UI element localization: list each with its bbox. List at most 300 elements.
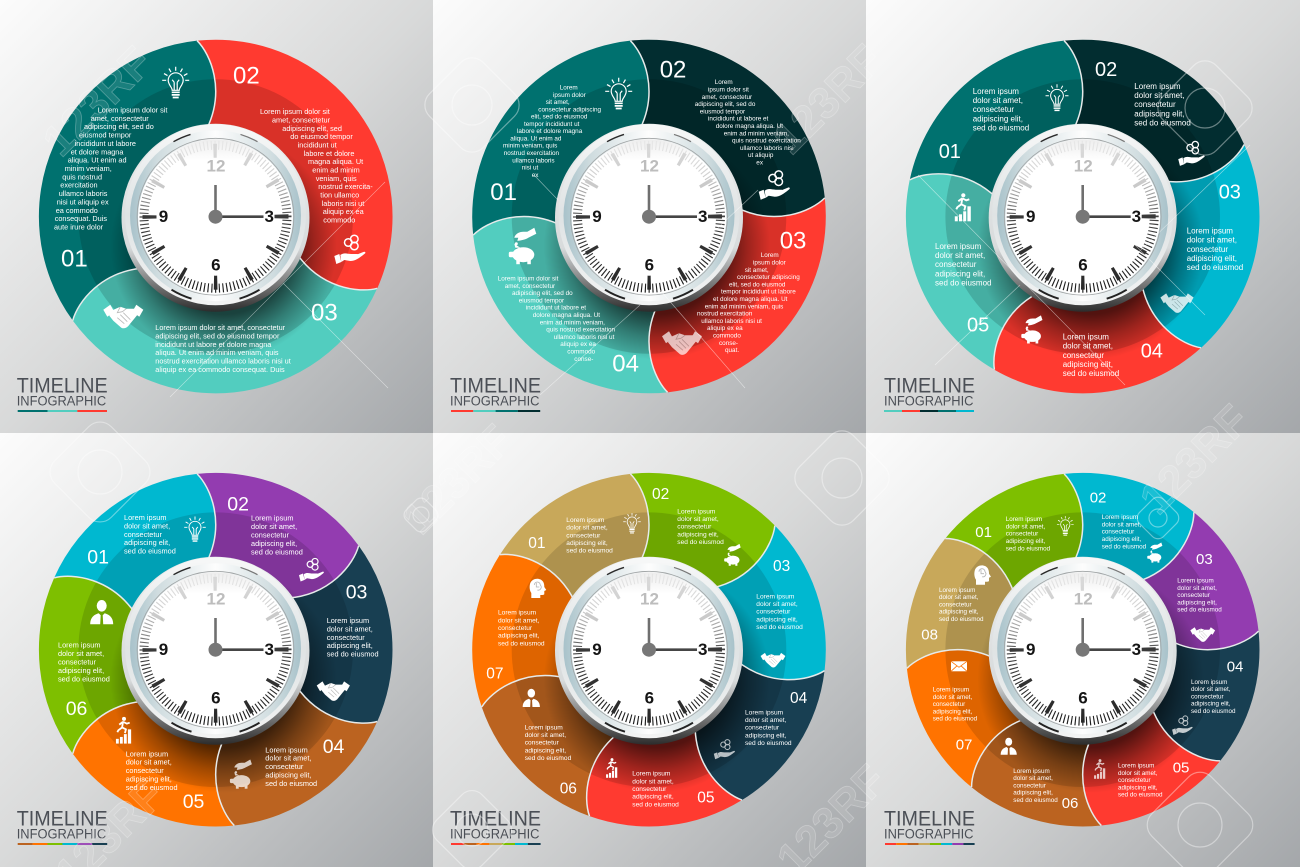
- text block 02: amet, consectetur: [702, 94, 752, 101]
- text block 03: nostrud exercitation: [697, 311, 753, 318]
- text block 04: consectetur: [745, 725, 780, 732]
- text block 02: ut aliquip: [748, 152, 774, 159]
- number 08: 08: [921, 627, 938, 644]
- text block 02: dolor sit amet,: [1102, 521, 1141, 528]
- text block 02: dolor sit amet,: [1134, 91, 1185, 100]
- number 05: 05: [697, 789, 715, 806]
- text block 04: incididunt ut labore et: [526, 305, 586, 312]
- text block 02: sed do eiusmod: [1102, 543, 1147, 550]
- text block 02: Lorem: [715, 79, 733, 86]
- text block 06: dolor sit amet,: [58, 649, 104, 658]
- text block 02: adipiscing elit,: [677, 531, 719, 538]
- segment 05: [1004, 637, 1221, 853]
- text block 03: sed do eiusmod: [1177, 607, 1222, 614]
- text block 06: consectetur: [525, 740, 560, 747]
- text block 07: adipiscing elit,: [933, 708, 973, 715]
- clock: [989, 124, 1177, 312]
- text block 02: Lorem ipsum: [251, 514, 293, 523]
- text block 01: nostrud exercitation: [504, 150, 560, 157]
- clock: 12: [207, 590, 225, 609]
- icon: handshake: [662, 331, 702, 355]
- number 06: 06: [1062, 795, 1078, 812]
- text block 07: Lorem ipsum: [933, 686, 969, 694]
- text block 01: ea commodo: [56, 206, 98, 215]
- icon: light bulb: [162, 67, 189, 98]
- clock: 12: [207, 157, 225, 176]
- segment 01: [472, 41, 649, 235]
- clock: 6: [645, 256, 654, 275]
- text block 04: dolor sit amet,: [1191, 686, 1231, 693]
- panel: 6-step timeline: [0, 433, 440, 867]
- clock: 3: [698, 207, 707, 226]
- segment 04: [621, 632, 826, 812]
- icon: envelope: [951, 661, 967, 671]
- text block 05: dolor sit amet,: [126, 758, 172, 767]
- logo: timeline infographic: TIMELINE: [450, 808, 541, 831]
- segment 01: [53, 437, 287, 666]
- text block 03: adipiscing elit, sed do eiusmod tempor: [155, 332, 280, 341]
- text block 01: tempor incididunt ut: [524, 121, 580, 128]
- icon: handshake: [761, 653, 785, 667]
- text block 08: consectetur: [939, 601, 972, 608]
- panel background: [433, 433, 867, 867]
- text block 03: commodo: [713, 332, 741, 340]
- text block 04: aliquip ex ea: [560, 341, 596, 348]
- icon: hand with coins: [1178, 141, 1205, 166]
- text block 01: sed do eiusmod: [1006, 545, 1051, 552]
- text block 02: consectetur: [1102, 529, 1134, 536]
- clock: [555, 124, 743, 312]
- text block 04: dolore magna aliqua. Ut: [533, 312, 600, 319]
- text block 03: incididunt ut labore et dolore magna: [155, 340, 272, 349]
- text block 02: quis nostrud exercitation: [732, 138, 801, 145]
- text block 04: conse-: [574, 356, 593, 363]
- text block 02: ipsum dolor sit: [708, 86, 749, 94]
- text block 06: consectetur: [58, 657, 97, 666]
- segment 02: [1064, 473, 1194, 650]
- logo: timeline infographic: INFOGRAPHIC: [450, 394, 540, 409]
- text block 03: Lorem ipsum dolor sit amet, consectetur: [155, 323, 286, 332]
- clock: 9: [159, 207, 168, 226]
- icon: hand with coins: [299, 558, 324, 582]
- text block 02: Lorem ipsum: [677, 508, 716, 515]
- number 01: 01: [61, 246, 88, 273]
- text block 03: consectetur: [327, 633, 365, 642]
- logo: timeline infographic: INFOGRAPHIC: [884, 394, 974, 409]
- text block 05: Lorem ipsum: [632, 771, 671, 778]
- number 02: 02: [660, 57, 686, 84]
- text block 03: conse-: [719, 340, 738, 347]
- text block 01: ex: [532, 172, 539, 179]
- text block 04: dolor sit amet,: [265, 754, 311, 763]
- text block 03: dolor sit amet,: [327, 624, 373, 633]
- segment 06: [0, 526, 225, 754]
- logo: timeline infographic: INFOGRAPHIC: [450, 827, 540, 842]
- text block 03: dolor sit amet,: [1187, 236, 1237, 245]
- text block 04: sed do eiusmod: [745, 740, 792, 747]
- icon: handshake: [317, 681, 350, 701]
- text block 03: dolor sit amet,: [756, 601, 798, 608]
- clock: [122, 124, 310, 312]
- text block 04: ullamco laboris nisi ut: [554, 334, 615, 341]
- text block 01: adipiscing elit, sed do: [84, 122, 154, 131]
- text block 02: tion ullamco: [320, 190, 359, 200]
- text block 02: nostrud exercita-: [318, 182, 373, 191]
- text block 01: sed do eiusmod: [566, 548, 613, 555]
- icon: person: [523, 689, 540, 707]
- number 01: 01: [87, 547, 109, 569]
- text block 03: sit amet,: [745, 267, 769, 274]
- text block 02: consectetur: [677, 524, 712, 531]
- text block 02: dolore magna aliqua. Ut: [716, 123, 783, 130]
- icon: piggy bank: [230, 760, 252, 789]
- text block 01: aute irure dolor: [54, 223, 104, 232]
- text block 02: Lorem ipsum dolor sit: [260, 107, 330, 116]
- logo: timeline infographic: INFOGRAPHIC: [17, 394, 106, 409]
- text block 03: enim ad minim veniam, quis: [705, 303, 783, 310]
- segment 03: [649, 198, 826, 392]
- clock: 12: [640, 590, 659, 609]
- segment 07: [879, 571, 1096, 788]
- text block 06: sed do eiusmod: [1013, 797, 1058, 804]
- number 04: 04: [323, 736, 345, 758]
- text block 07: adipiscing elit,: [498, 633, 540, 640]
- number 04: 04: [1141, 340, 1163, 362]
- text block 04: Lorem ipsum: [1063, 332, 1109, 342]
- watermarks: 123RF: [394, 416, 522, 544]
- segment 04: [473, 216, 668, 393]
- text block 01: Lorem ipsum: [124, 513, 166, 522]
- clock: 3: [264, 207, 274, 226]
- text block 02: veniam, quis: [316, 174, 357, 183]
- text block 02: adipiscing elit,: [1134, 109, 1185, 118]
- text block 01: eiusmod tempor: [79, 131, 132, 140]
- text block 04: sed do eiusmod: [1191, 708, 1236, 715]
- text block 02: enim ad minim veniam,: [724, 130, 789, 137]
- text block 06: dolor sit amet,: [525, 732, 566, 739]
- text block 05: sed do eiusmod: [126, 783, 178, 792]
- clock: 6: [1078, 689, 1088, 708]
- panel: 4-step timeline: [433, 0, 867, 434]
- clock: 3: [698, 640, 707, 659]
- logo: timeline infographic: INFOGRAPHIC: [17, 827, 106, 842]
- number 04: 04: [1227, 658, 1243, 675]
- text block 06: adipiscing elit,: [58, 666, 104, 675]
- clock: [122, 557, 310, 745]
- segment 01: [0, 27, 289, 321]
- text block 03: adipiscing elit,: [327, 641, 373, 650]
- segment 02: [1064, 40, 1244, 216]
- text block 01: dolor sit amet,: [1006, 523, 1045, 530]
- text block 03: adipiscing elit,: [1187, 254, 1237, 263]
- text block 05: consectetur: [935, 260, 977, 269]
- logo: timeline infographic: [450, 808, 541, 845]
- text block 01: Lorem ipsum: [566, 517, 605, 524]
- icon: hand with coins: [714, 740, 735, 759]
- watermarks: 123RF: [764, 36, 892, 164]
- text block 01: consequat. Duis: [55, 214, 107, 223]
- text block 01: incididunt ut labore: [75, 139, 136, 148]
- icon: person: [90, 600, 113, 624]
- text block 02: incididunt ut: [298, 141, 337, 150]
- text block 02: incididunt ut labore et: [708, 116, 769, 123]
- panel background: [866, 0, 1300, 434]
- panel: 7-step timeline: [433, 433, 867, 867]
- panel background: [433, 0, 867, 434]
- text block 07: consectetur: [933, 701, 965, 708]
- segment 04: [1083, 631, 1259, 761]
- number 05: 05: [967, 315, 989, 337]
- text block 03: Lorem ipsum: [327, 616, 369, 625]
- text block 05: Lorem ipsum: [1118, 762, 1154, 770]
- clock: [555, 557, 743, 745]
- icon: piggy bank: [509, 228, 536, 264]
- text block 07: sed do eiusmod: [498, 640, 545, 647]
- number 03: 03: [346, 582, 367, 604]
- number 03: 03: [780, 228, 806, 255]
- number 01: 01: [939, 141, 961, 163]
- text block 02: Lorem ipsum: [1134, 82, 1181, 91]
- logo: timeline infographic: TIMELINE: [884, 375, 975, 398]
- text block 02: do eiusmod tempor: [290, 132, 353, 141]
- text block 03: aliquip ex ea: [707, 325, 743, 332]
- text block 01: adipiscing elit,: [973, 114, 1023, 123]
- text block 03: Lorem ipsum: [1177, 578, 1214, 584]
- clock: 9: [592, 207, 602, 226]
- segment 03: [1070, 512, 1286, 728]
- segment 08: [906, 539, 1083, 668]
- text block 01: minim veniam,: [65, 164, 112, 173]
- text block 03: tempor incididunt ut labore: [721, 289, 796, 296]
- text block 04: adipiscing elit,: [1063, 360, 1113, 369]
- circle diagram: [848, 8, 1300, 454]
- text block 01: minim veniam, quis: [503, 143, 557, 150]
- text block 01: sit amet,: [546, 99, 570, 106]
- icon: person: [1001, 738, 1017, 755]
- text block 02: sed do eiusmod: [677, 539, 724, 546]
- segment 05: [73, 650, 234, 826]
- panel: 8-step timeline: [866, 433, 1300, 867]
- icon: handshake: [1190, 627, 1215, 642]
- text block 02: dolor sit amet,: [251, 522, 297, 531]
- text block 03: Lorem: [761, 252, 779, 259]
- number 02: 02: [1095, 59, 1117, 81]
- text block 05: adipiscing elit,: [126, 775, 172, 784]
- clock: 3: [1132, 640, 1141, 659]
- watermarks: 123RF: [34, 38, 162, 166]
- text block 07: dolor sit amet,: [933, 694, 972, 701]
- text block 03: sed do eiusmod: [756, 624, 803, 631]
- icon: light bulb: [623, 513, 641, 533]
- logo: timeline infographic: [884, 375, 975, 412]
- text block 01: elit, sed do eiusmod: [531, 114, 588, 121]
- text block 03: consectetur: [1177, 592, 1210, 599]
- text block 02: ullamco laboris nisi: [740, 145, 794, 152]
- clock: 6: [1078, 256, 1088, 275]
- text block 05: dolor sit amet,: [632, 778, 674, 785]
- text block 03: ipsum dolor: [753, 260, 786, 266]
- number 06: 06: [66, 698, 87, 720]
- text block 01: dolor sit amet,: [124, 521, 170, 530]
- clock: 9: [1026, 640, 1035, 659]
- text block 01: amet, consectetur: [91, 114, 149, 123]
- text block 04: Lorem ipsum: [745, 709, 784, 716]
- clock: 12: [1074, 590, 1093, 609]
- text block 02: ex: [756, 160, 764, 166]
- panel: 5-step timeline: [848, 0, 1300, 454]
- text block 02: adipiscing elit,: [1102, 536, 1142, 543]
- text block 01: Lorem ipsum: [1006, 516, 1042, 523]
- text block 06: consectetur: [1013, 782, 1046, 789]
- icon: runner on bars: [955, 193, 971, 221]
- text block 04: enim ad minim veniam,: [540, 319, 605, 326]
- text block 05: Lorem ipsum: [935, 242, 982, 251]
- number 02: 02: [227, 493, 249, 515]
- text block 03: quat.: [725, 347, 739, 354]
- text block 01: Lorem ipsum: [973, 87, 1019, 96]
- text block 04: adipiscing elit, sed do: [512, 290, 573, 297]
- number 07: 07: [486, 666, 504, 683]
- text block 04: Lorem ipsum dolor sit: [498, 276, 559, 282]
- text block 04: adipiscing elit,: [265, 771, 311, 780]
- segment 03: [64, 164, 378, 458]
- segment 02: [630, 473, 775, 650]
- text block 02: dolor sit amet,: [677, 516, 719, 523]
- text block 07: dolor sit amet,: [498, 617, 540, 624]
- panel background: [0, 0, 434, 434]
- logo: timeline infographic: INFOGRAPHIC: [884, 827, 974, 842]
- text block 01: exercitation: [60, 181, 98, 190]
- text block 04: consectetur: [265, 762, 304, 771]
- text block 04: quis nostrud exercitation: [546, 327, 616, 334]
- logo: timeline infographic: TIMELINE: [17, 375, 108, 398]
- segment 03: [206, 545, 440, 774]
- clock: 6: [211, 689, 221, 708]
- text block 08: dolor sit amet,: [939, 594, 979, 601]
- text block 05: sed do eiusmod: [935, 278, 991, 287]
- text block 03: elit, sed do eiusmod: [729, 281, 786, 288]
- text block 02: labore et dolore: [304, 149, 354, 158]
- number 03: 03: [1196, 551, 1213, 568]
- logo: timeline infographic: [17, 808, 108, 845]
- icon: piggy bank: [1021, 315, 1042, 343]
- text block 01: sed do eiusmod: [124, 547, 176, 556]
- text block 01: aliqua. Ut enim ad: [68, 156, 127, 165]
- text block 05: consectetur: [632, 786, 667, 793]
- number 05: 05: [183, 791, 205, 813]
- text block 01: aliqua. Ut enim ad: [510, 135, 562, 142]
- panel background: [866, 433, 1300, 867]
- logo: timeline infographic: [884, 808, 975, 845]
- text block 06: adipiscing elit,: [525, 747, 566, 754]
- text block 04: consectetur: [1191, 693, 1224, 700]
- text block 04: dolor sit amet,: [1063, 342, 1113, 351]
- text block 07: sed do eiusmod: [933, 716, 978, 723]
- number 02: 02: [1090, 490, 1106, 507]
- icon: runner on bars: [606, 758, 617, 778]
- clock: 12: [640, 157, 659, 176]
- text block 03: consectetur: [756, 609, 791, 616]
- text block 01: ipsum dolor: [553, 92, 586, 99]
- logo: timeline infographic: [450, 375, 541, 412]
- text block 01: quis nostrud: [62, 172, 102, 181]
- icon: head with brain: [530, 579, 546, 598]
- text block 02: commodo: [323, 215, 355, 224]
- icon: head with brain: [974, 565, 991, 585]
- segment 06: [972, 650, 1101, 826]
- text block 08: Lorem ipsum: [939, 587, 975, 594]
- text block 02: sed do eiusmod: [251, 547, 303, 556]
- segment 05: [536, 642, 742, 864]
- text block 07: Lorem ipsum: [498, 610, 537, 617]
- circle diagram: [449, 441, 866, 864]
- watermarks: 123RF: [1131, 396, 1259, 524]
- number 04: 04: [790, 690, 808, 707]
- icon: handshake: [1160, 293, 1194, 313]
- text block 01: labore et dolore magna: [517, 128, 583, 135]
- text block 03: aliqua. Ut enim ad minim veniam, quis: [155, 348, 279, 357]
- text block 06: Lorem ipsum: [58, 641, 100, 650]
- icon: hand with coins: [334, 235, 365, 264]
- text block 01: consectetur: [566, 532, 601, 539]
- number 03: 03: [773, 558, 790, 575]
- text block 01: adipiscing elit,: [566, 540, 608, 547]
- text block 04: sed do eiusmod: [1063, 369, 1119, 378]
- segment 03: [637, 525, 866, 748]
- text block 05: adipiscing elit,: [1118, 784, 1158, 791]
- text block 04: consectetur: [1063, 351, 1104, 360]
- segment 07: [449, 527, 653, 707]
- text block 05: dolor sit amet,: [1118, 770, 1158, 777]
- text block 02: consectetur: [251, 530, 290, 539]
- icon: piggy bank: [1147, 543, 1162, 563]
- segment 04: [144, 634, 378, 862]
- logo: timeline infographic: TIMELINE: [450, 375, 541, 398]
- text block 07: consectetur: [498, 625, 533, 632]
- text block 02: adipiscing elit, sed: [282, 124, 342, 133]
- icon: hand with coins: [759, 171, 790, 200]
- text block 01: nisi ut: [522, 165, 539, 172]
- text block 04: Lorem ipsum: [265, 745, 308, 754]
- text block 05: sed do eiusmod: [632, 801, 679, 808]
- text block 05: consectetur: [1118, 777, 1151, 784]
- clock: [989, 557, 1177, 745]
- segment 02: [630, 40, 825, 216]
- text block 06: dolor sit amet,: [1013, 775, 1053, 782]
- text block 02: laboris nisi ut: [322, 199, 364, 208]
- clock: 12: [1074, 157, 1093, 176]
- text block 01: adipiscing elit,: [124, 538, 170, 547]
- segment 01: [909, 8, 1133, 234]
- text block 03: Lorem ipsum: [1187, 226, 1233, 236]
- logo: timeline infographic: TIMELINE: [884, 808, 975, 831]
- segment 03: [1077, 144, 1300, 370]
- text block 02: eiusmod tempor: [700, 108, 745, 115]
- text block 02: adipiscing elit,: [251, 539, 297, 548]
- icon: light bulb: [605, 78, 632, 108]
- panel: 3-step timeline: [0, 0, 434, 458]
- icon: piggy bank: [724, 544, 741, 566]
- logo: timeline infographic: [17, 375, 108, 412]
- text block 08: adipiscing elit,: [939, 609, 979, 616]
- clock: 9: [159, 640, 168, 659]
- text block 05: Lorem ipsum: [126, 749, 168, 758]
- text block 03: sed do eiusmod: [1187, 263, 1243, 272]
- number 06: 06: [560, 781, 577, 798]
- icon: light bulb: [1057, 516, 1074, 535]
- icon: hand with coins: [1172, 716, 1193, 735]
- text block 03: adipiscing elit,: [1177, 599, 1217, 606]
